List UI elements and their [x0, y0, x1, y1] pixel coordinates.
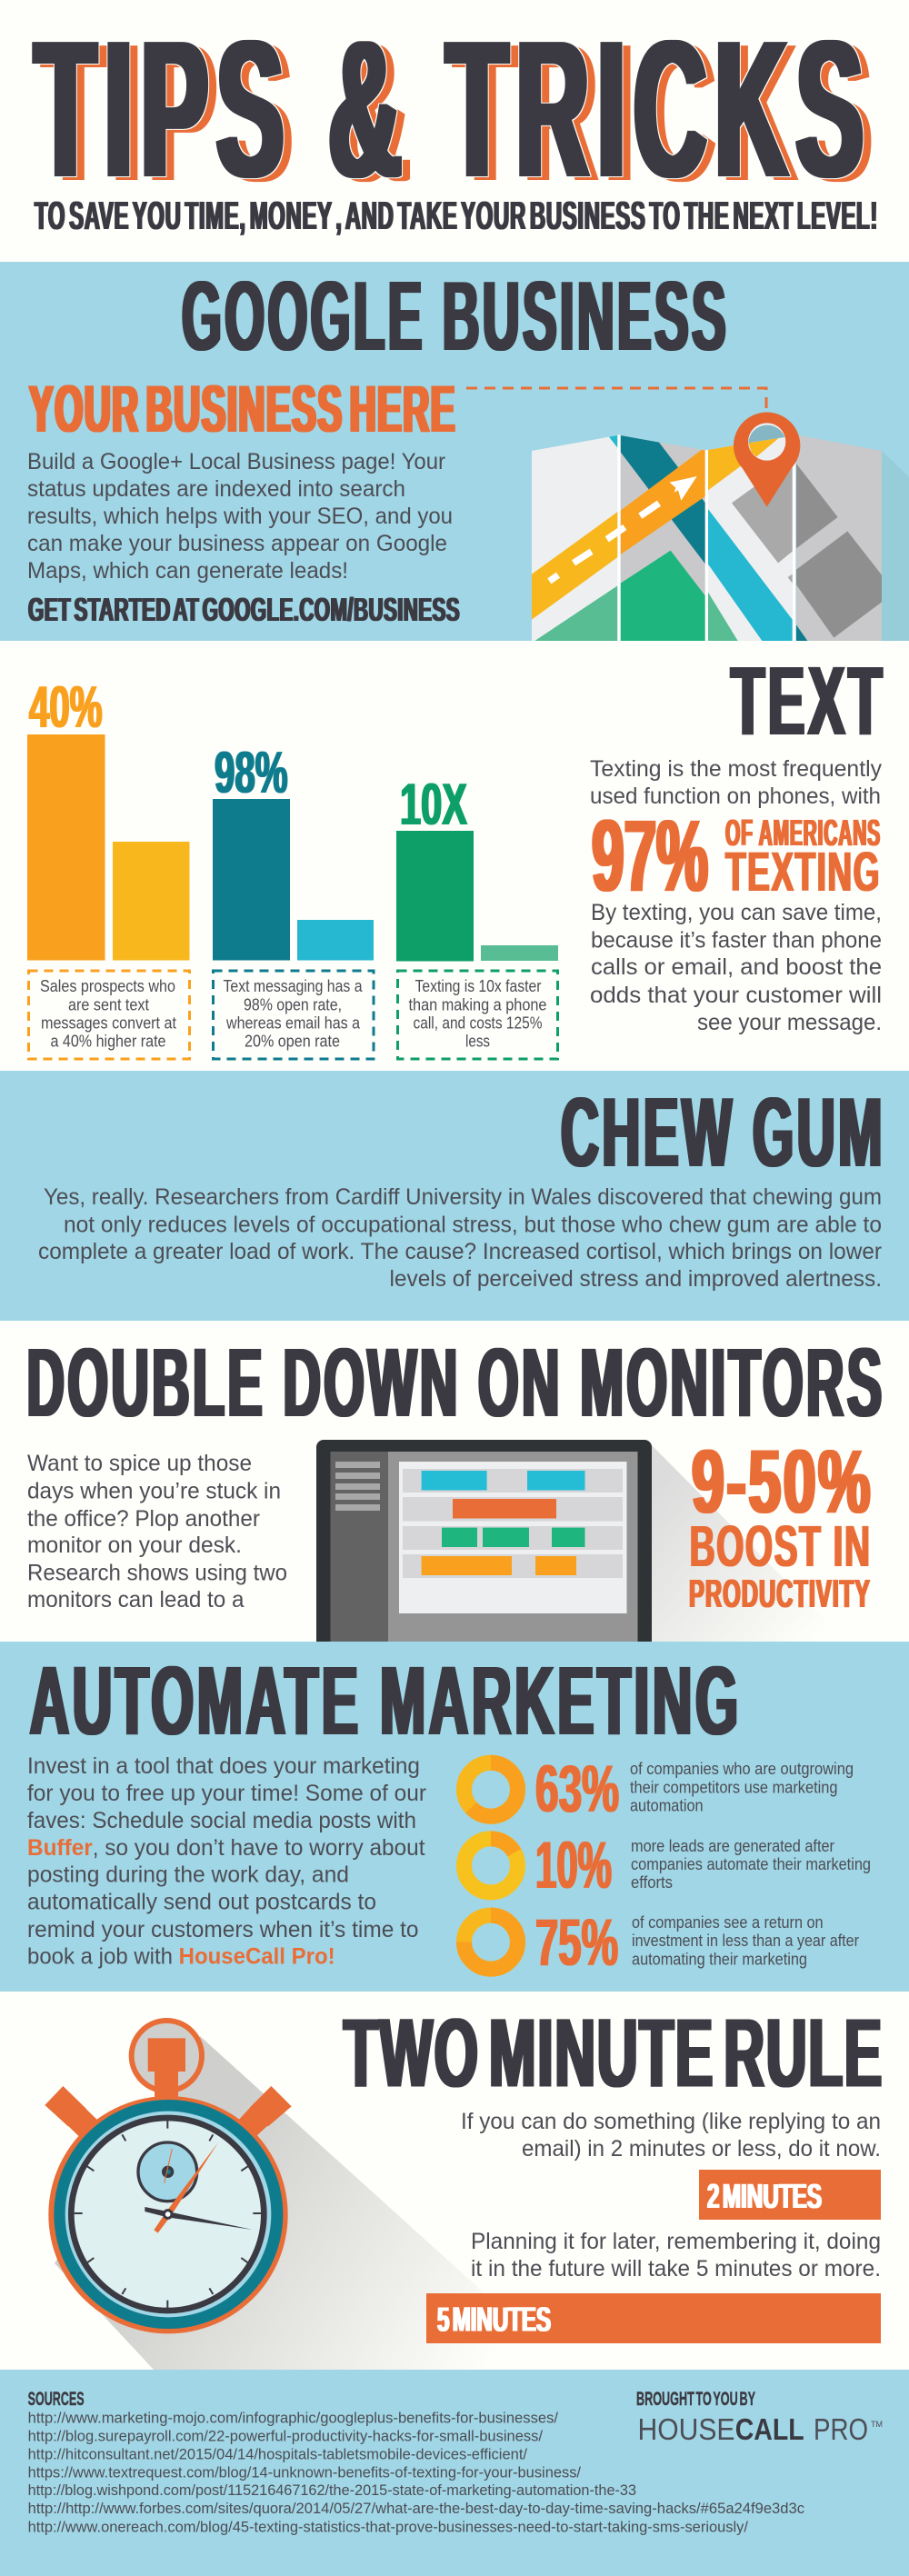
- paragraph: two minutes: If you can do something (like replying to an: [461, 2109, 881, 2134]
- sources list: http://www.marketing-mojo.com/infographic/googleplus-benefits-for-businesses/: [28, 2411, 558, 2427]
- callout: open rate: Text messaging has a: [224, 977, 363, 995]
- automate paragraph: faves: Schedule social media posts with: [27, 1808, 416, 1833]
- monitors paragraph: Want to spice up those: [27, 1451, 252, 1476]
- callout: 10x faster: than making a phone: [409, 996, 547, 1014]
- logo: housecall pro: [638, 2412, 883, 2446]
- panel: automate marketing: [0, 1642, 909, 1992]
- callout: open rate: 20% open rate: [245, 1033, 340, 1051]
- automate paragraph: book a job with HouseCall Pro!: [27, 1943, 335, 1969]
- icon: folded map with pin: [532, 413, 909, 641]
- callout: open rate: 98% open rate,: [244, 996, 342, 1014]
- paragraph: five minutes: it in the future will take 5 minutes or more.: [471, 2256, 881, 2281]
- callout: sales prospects: a 40% higher rate: [51, 1033, 165, 1051]
- stat: 10 percent: efforts: [631, 1873, 673, 1892]
- donut chart: 75 percent: [464, 1915, 518, 1969]
- text intro paragraph: used function on phones, with: [590, 784, 881, 809]
- paragraph: two minutes: [461, 2109, 881, 2162]
- bar: 5 minutes: 5 MINUTES: [437, 2301, 551, 2340]
- paragraph: five minutes: [471, 2229, 881, 2281]
- bar chart: 10x: 10X: [400, 771, 467, 837]
- automate paragraph: Invest in a tool that does your marketing: [27, 1753, 420, 1779]
- donut chart: 10 percent: [464, 1839, 518, 1892]
- icon: monitor with schedule: [316, 1440, 652, 1642]
- chew gum paragraph: [38, 1184, 882, 1292]
- callout: sales prospects: Sales prospects who: [40, 977, 175, 995]
- automate paragraph: automatically send out postcards to: [27, 1890, 376, 1915]
- stat: 75 percent: of companies see a return on: [632, 1913, 824, 1932]
- automate paragraph: for you to free up your time! Some of our: [27, 1781, 426, 1806]
- text benefits paragraph: odds that your customer will: [590, 983, 882, 1008]
- text benefits paragraph: [590, 900, 882, 1035]
- stat: 10 percent: more leads are generated after: [631, 1837, 834, 1855]
- callout: sales prospects: messages convert at: [41, 1014, 176, 1033]
- stat: 10 percent: [464, 1829, 871, 1902]
- google business paragraph: status updates are indexed into search: [27, 476, 405, 502]
- monitors paragraph: Research shows using two: [27, 1560, 287, 1585]
- bar: 2 minutes: 2 MINUTES: [707, 2178, 822, 2216]
- text benefits paragraph: calls or email, and boost the: [591, 954, 882, 980]
- chew gum paragraph: complete a greater load of work. The cause? Increased cortisol, which brings on lower: [38, 1239, 882, 1264]
- stat: 75 percent: 75%: [535, 1906, 618, 1980]
- sources heading: SOURCES: [28, 2389, 85, 2410]
- stat: 10 percent: companies automate their marketing: [631, 1855, 871, 1873]
- panel: two minute rule: [45, 1998, 884, 2370]
- panel: text: [27, 645, 885, 1059]
- donut chart: 63 percent: [464, 1762, 518, 1816]
- sources list: [28, 2389, 804, 2536]
- bar chart: 98 percent: 98%: [215, 739, 287, 805]
- stopwatch sub-dial: [138, 2142, 197, 2202]
- brought to you by: BROUGHT TO YOU BY: [636, 2389, 755, 2410]
- logo: housecall pro: TM: [871, 2420, 883, 2429]
- stat: 63 percent: automation: [630, 1797, 704, 1815]
- bar chart: 10x: [396, 771, 558, 962]
- sources list: https://www.textrequest.com/blog/14-unknown-benefits-of-texting-for-your-business/: [28, 2465, 581, 2481]
- chew gum paragraph: Yes, really. Researchers from Cardiff University in Wales discovered that chewing gum: [44, 1184, 882, 1210]
- text benefits paragraph: see your message.: [697, 1010, 882, 1035]
- logo: housecall pro: PRO: [806, 2412, 868, 2446]
- google business paragraph: [27, 449, 453, 584]
- stopwatch hands: [145, 2142, 253, 2233]
- stat: 63 percent: of companies who are outgrowing: [630, 1760, 854, 1778]
- bar chart: 98 percent: [213, 739, 374, 960]
- icon: long shadow of monitor: [652, 1445, 846, 1642]
- sources list: http://http://www.forbes.com/sites/quora/2014/05/27/what-are-the-best-day-to-day-time-saving-hacks/#65a24f9e3d3c: [28, 2501, 804, 2517]
- automate paragraph: Buffer, so you don’t have to worry about: [27, 1835, 425, 1861]
- bar: 5 minutes: [426, 2293, 881, 2343]
- text intro paragraph: [590, 756, 882, 809]
- stopwatch ticks: [75, 2121, 261, 2308]
- subheading: your business here: YOUR BUSINESS HERE: [29, 373, 456, 446]
- chew gum paragraph: not only reduces levels of occupational stress, but those who chew gum are able to: [64, 1213, 882, 1238]
- panel: google business: [0, 261, 909, 641]
- google business paragraph: Maps, which can generate leads!: [27, 558, 348, 584]
- icon: long shadow of stopwatch: [55, 2036, 569, 2370]
- sources list: http://blog.wishpond.com/post/115216467162/the-2015-state-of-marketing-automation-the-33: [28, 2482, 636, 2499]
- panel: monitors: [27, 1327, 885, 1642]
- chew gum paragraph: levels of perceived stress and improved alertness.: [389, 1266, 882, 1292]
- text intro paragraph: Texting is the most frequently: [590, 756, 882, 782]
- monitors paragraph: [27, 1451, 287, 1612]
- sources list: http://blog.surepayroll.com/22-powerful-productivity-hacks-for-small-business/: [28, 2429, 543, 2445]
- sources list: http://hitconsultant.net/2015/04/14/hospitals-tabletsmobile-devices-efficient/: [28, 2446, 527, 2462]
- panel: footer: [0, 2370, 909, 2576]
- stat: 75 percent: [464, 1906, 859, 1980]
- callout: sales prospects: [29, 971, 189, 1059]
- callout: open rate: [213, 971, 374, 1059]
- dashed connector to map pin: [466, 388, 766, 409]
- monitors paragraph: monitor on your desk.: [27, 1533, 242, 1558]
- callout: open rate: whereas email has a: [225, 1014, 361, 1033]
- stat: 10 percent: 10%: [535, 1829, 612, 1902]
- automate paragraph: remind your customers when it’s time to: [27, 1917, 418, 1942]
- bar chart: 40 percent: [27, 674, 189, 960]
- google business paragraph: results, which helps with your SEO, and you: [27, 504, 453, 529]
- stat: 63 percent: 63%: [535, 1752, 619, 1826]
- paragraph: five minutes: Planning it for later, remembering it, doing: [471, 2229, 881, 2254]
- text benefits paragraph: By texting, you can save time,: [591, 900, 882, 925]
- logo: housecall pro: HOUSE: [638, 2412, 734, 2446]
- google business paragraph: can make your business appear on Google: [27, 531, 447, 556]
- paragraph: two minutes: email) in 2 minutes or less, do it now.: [522, 2136, 881, 2162]
- automate paragraph: [27, 1753, 426, 1969]
- bar chart: 40 percent: 40%: [29, 674, 102, 740]
- stat: 63 percent: [464, 1752, 854, 1826]
- stat: 75 percent: investment in less than a year after: [632, 1932, 859, 1950]
- google business paragraph: Build a Google+ Local Business page! Your: [27, 449, 445, 474]
- stat: 9-50 percent boost in productivity: [689, 1431, 873, 1616]
- monitors paragraph: monitors can lead to a: [27, 1587, 245, 1612]
- icon: location pin: [734, 413, 800, 507]
- sources list: http://www.onereach.com/blog/45-texting-statistics-that-prove-businesses-need-to-start-taking-sms-seriously/: [28, 2520, 748, 2536]
- icon: stopwatch: [45, 2021, 292, 2333]
- monitors paragraph: the office? Plop another: [27, 1506, 260, 1532]
- text benefits paragraph: because it’s faster than phone: [591, 927, 882, 953]
- callout: 10x faster: call, and costs 125%: [413, 1014, 542, 1033]
- stat: 63 percent: their competitors use marketing: [630, 1778, 838, 1796]
- stat: 97 percent of americans texting: 97%: [592, 799, 708, 913]
- stat: 75 percent: automating their marketing: [632, 1951, 807, 1969]
- callout: 10x faster: Texting is 10x faster: [415, 977, 542, 995]
- callout: 10x faster: [398, 971, 558, 1059]
- monitors paragraph: days when you’re stuck in: [27, 1478, 281, 1503]
- callout: sales prospects: are sent text: [68, 996, 149, 1014]
- automate paragraph: posting during the work day, and: [27, 1862, 349, 1888]
- call to action: GET STARTED AT GOOGLE.COM/BUSINESS: [28, 591, 460, 628]
- logo: housecall pro: CALL: [735, 2412, 804, 2446]
- callout: 10x faster: less: [465, 1033, 490, 1051]
- panel: chew gum: [0, 1071, 909, 1321]
